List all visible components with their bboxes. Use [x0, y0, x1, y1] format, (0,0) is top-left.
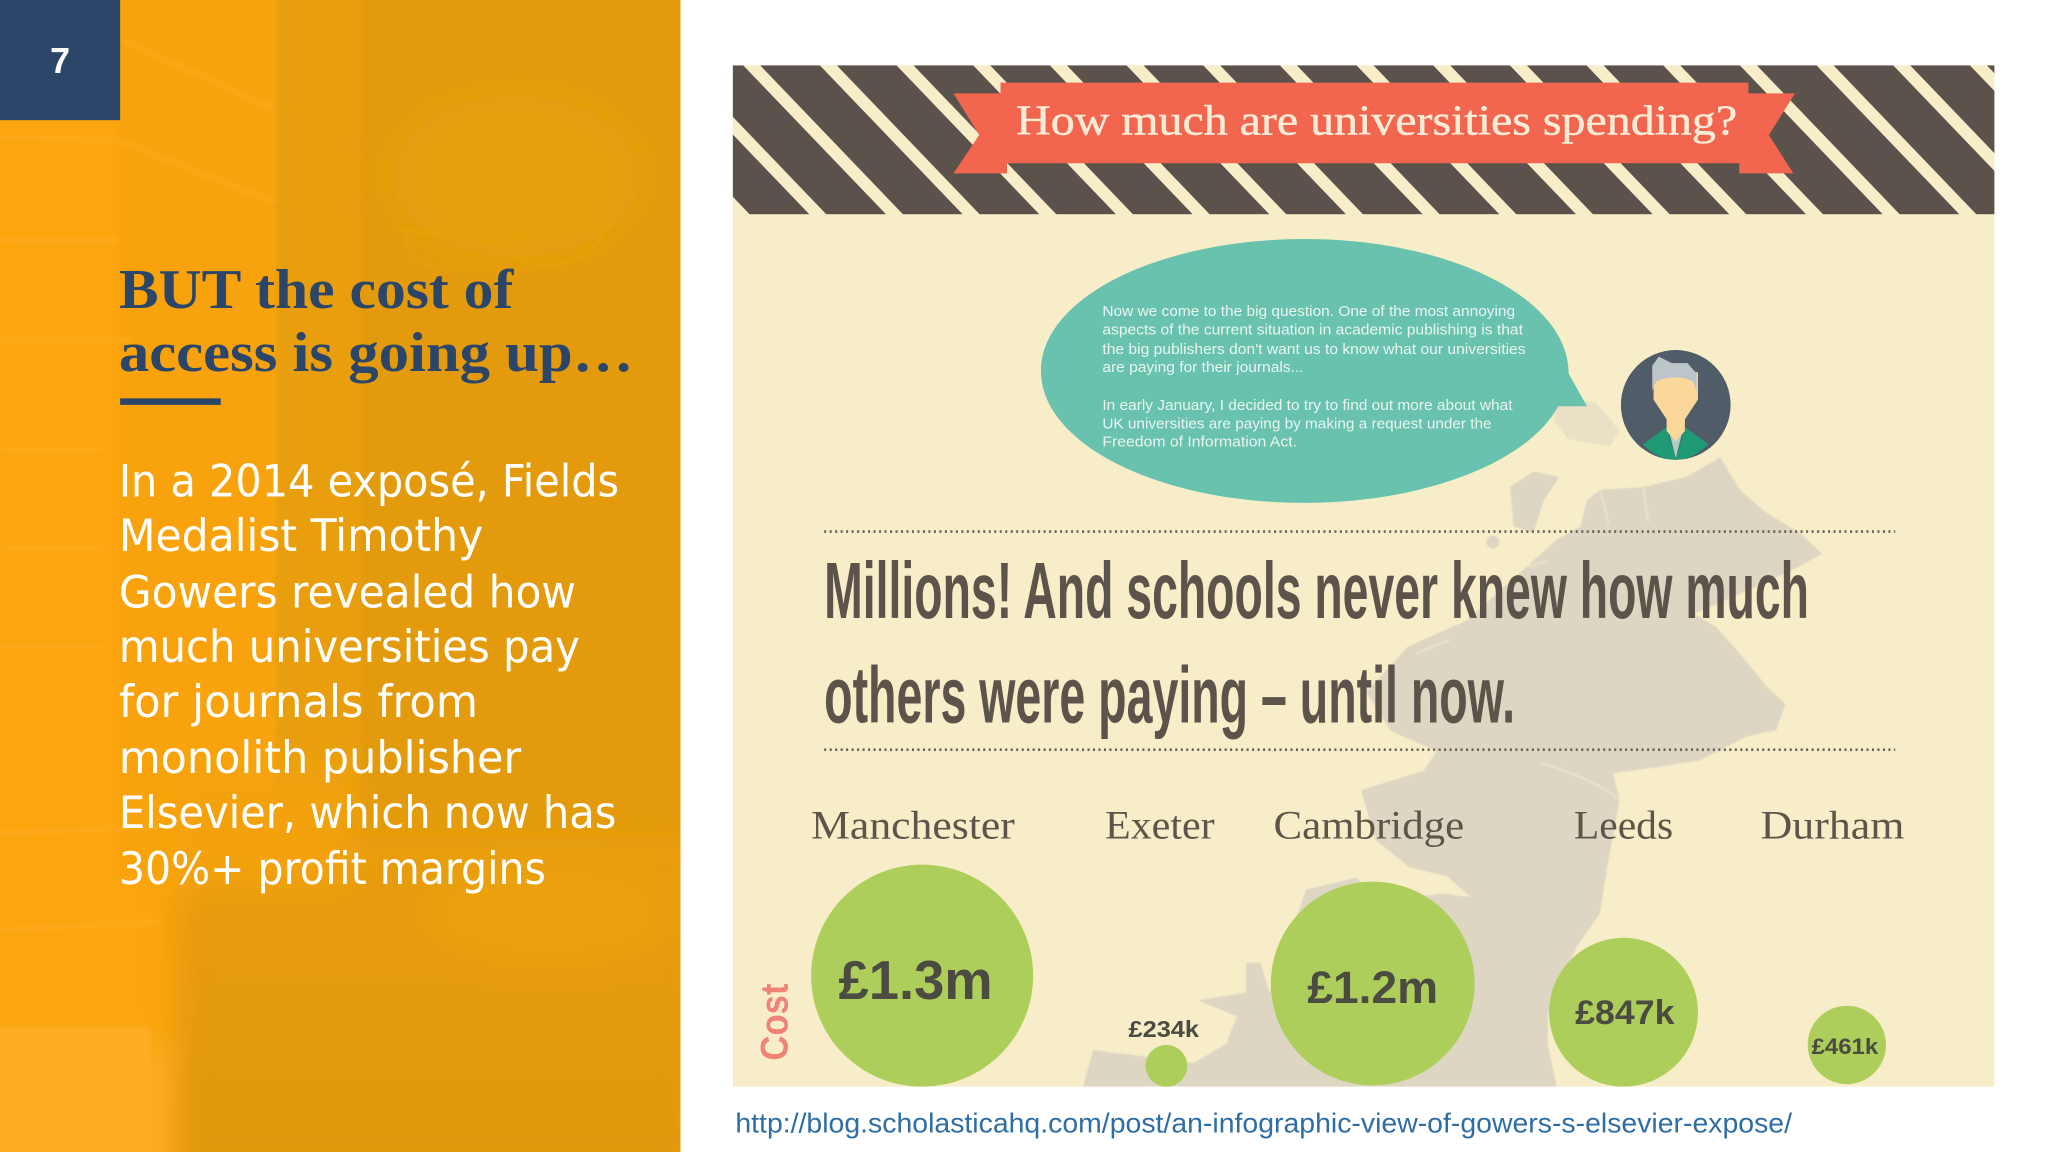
icon: avatar — [1621, 350, 1731, 460]
body text: monolith publisher — [119, 733, 522, 784]
page number badge — [0, 0, 120, 120]
university labels: Leeds — [1574, 803, 1673, 848]
main statement — [824, 546, 1809, 739]
cost values: £1.3m — [839, 949, 993, 1011]
speech bubble: Freedom of Information Act. — [1102, 435, 1297, 451]
cost values: £234k — [1128, 1016, 1200, 1042]
map of the UK — [1083, 400, 1822, 1087]
university labels: Cambridge — [1273, 803, 1464, 848]
striped header band — [733, 65, 1994, 214]
body text — [119, 456, 619, 895]
cost values: £847k — [1575, 994, 1675, 1032]
university labels: Durham — [1761, 803, 1904, 848]
body text: 30%+ profit margins — [119, 844, 546, 895]
source link: http://blog.scholasticahq.com/post/an-infographic-view-of-gowers-s-elsevier-expose/ — [735, 1107, 1792, 1138]
university labels: Manchester — [811, 803, 1015, 848]
body text: Gowers revealed how — [119, 567, 576, 618]
speech bubble: In early January, I decided to try to find out more about what — [1102, 398, 1512, 414]
dotted divider bottom — [824, 749, 1895, 751]
heading underline — [120, 398, 221, 405]
body text: much universities pay — [119, 622, 580, 673]
heading — [119, 259, 633, 384]
dotted divider top — [824, 531, 1895, 533]
speech bubble: Now we come to the big question. One of the most annoying — [1102, 304, 1515, 320]
cost values: £461k — [1812, 1034, 1879, 1059]
title ribbon — [953, 83, 1795, 173]
body text: In a 2014 exposé, Fields — [119, 456, 619, 507]
speech bubble: the big publishers don't want us to know what our universities — [1102, 342, 1526, 358]
panel: left orange photo background — [0, 0, 700, 1152]
cost values: £1.2m — [1307, 962, 1438, 1013]
heading: BUT the cost of — [119, 259, 515, 321]
body text: Elsevier, which now has — [119, 788, 616, 839]
cost circles — [811, 865, 1886, 1087]
speech bubble — [1041, 239, 1587, 503]
title ribbon: How much are universities spending? — [1016, 99, 1737, 145]
speech bubble: UK universities are paying by making a request under the — [1102, 416, 1492, 432]
university labels — [812, 810, 1904, 847]
panel: embedded infographic — [733, 65, 1994, 1087]
body text: Medalist Timothy — [119, 511, 483, 562]
university labels: Exeter — [1105, 803, 1215, 848]
speech bubble: are paying for their journals... — [1102, 360, 1304, 376]
main statement: others were paying – until now. — [824, 650, 1515, 739]
heading: access is going up… — [119, 322, 633, 384]
cost values — [839, 960, 1878, 1054]
speech bubble: aspects of the current situation in academic publishing is that — [1102, 322, 1523, 338]
axis label: cost: Cost — [754, 984, 797, 1061]
page number badge: 7 — [50, 40, 70, 81]
body text: for journals from — [119, 677, 478, 728]
